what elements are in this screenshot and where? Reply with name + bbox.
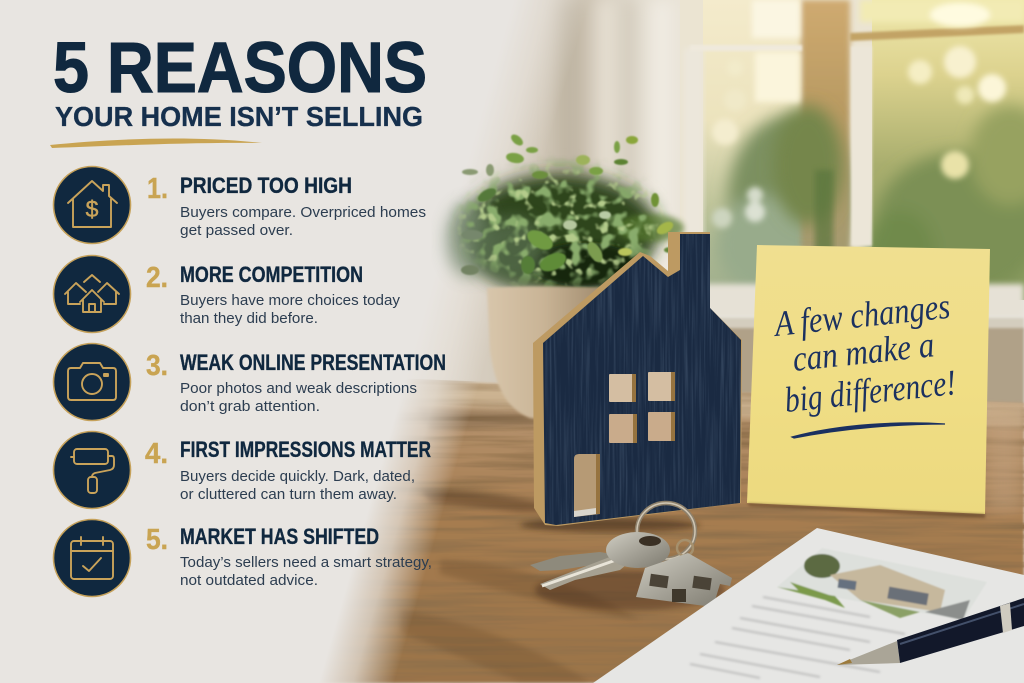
number 2: 2. <box>146 262 168 294</box>
window with garden view <box>680 0 1024 300</box>
description: don’t grab attention. <box>180 399 320 415</box>
icon: house with dollar sign <box>54 166 130 244</box>
reason 3: weak online presentation <box>54 344 446 420</box>
icon: calendar with check <box>54 520 130 596</box>
icon: cluster of houses <box>54 256 130 332</box>
house door <box>574 454 600 517</box>
house keys <box>530 503 732 610</box>
wall and curtain <box>380 0 700 410</box>
potted plant <box>436 134 688 420</box>
description <box>180 293 401 327</box>
gold brush underline <box>50 139 262 148</box>
number 3: 3. <box>146 350 168 382</box>
heading: FIRST IMPRESSIONS MATTER <box>180 437 431 462</box>
description: than they did before. <box>180 311 318 327</box>
number 5: 5. <box>146 524 168 556</box>
plant pot <box>487 286 600 420</box>
paper text lines <box>690 597 905 678</box>
description: Today’s sellers need a smart strategy, <box>180 555 432 571</box>
description: Buyers compare. Overpriced homes <box>180 205 426 221</box>
window sill and lower wall <box>700 284 1024 406</box>
plant foliage <box>436 134 688 290</box>
handwritten message: can make a <box>791 324 936 379</box>
house keychain charm <box>636 553 732 607</box>
reason 2: more competition <box>54 256 401 332</box>
description <box>180 469 415 503</box>
handwritten message: big difference! <box>783 362 958 420</box>
wooden table <box>326 380 1024 683</box>
heading: MORE COMPETITION <box>180 262 363 287</box>
icon: house with dollar sign: $ <box>86 196 99 222</box>
house windows <box>609 372 675 443</box>
reason 1: priced too high <box>54 166 426 244</box>
pen <box>837 598 1024 665</box>
description: or cluttered can turn them away. <box>180 487 397 503</box>
reason 4: first impressions matter <box>54 432 431 508</box>
heading: MARKET HAS SHIFTED <box>180 524 379 549</box>
description <box>180 555 432 589</box>
subtitle: YOUR HOME ISN’T SELLING <box>55 101 423 132</box>
icon: paint roller <box>54 432 130 508</box>
sticky note <box>747 245 990 518</box>
note underline <box>792 423 945 438</box>
icon: camera <box>54 344 130 420</box>
description: Buyers decide quickly. Dark, dated, <box>180 469 415 485</box>
handwritten message <box>771 286 958 420</box>
title: 5 REASONS <box>53 29 427 108</box>
wooden house cutout <box>520 230 745 532</box>
handwritten message: A few changes <box>771 286 952 344</box>
heading: PRICED TOO HIGH <box>180 173 352 198</box>
description: get passed over. <box>180 223 293 239</box>
photo background <box>326 0 1024 683</box>
number 4: 4. <box>145 438 168 470</box>
number 1: 1. <box>147 173 168 205</box>
description <box>180 381 417 415</box>
description: Poor photos and weak descriptions <box>180 381 417 397</box>
listing house photo <box>777 548 987 620</box>
description: Buyers have more choices today <box>180 293 401 309</box>
reason 5: market has shifted <box>54 520 432 596</box>
description: not outdated advice. <box>180 573 318 589</box>
heading: WEAK ONLINE PRESENTATION <box>180 350 446 375</box>
description <box>180 205 426 239</box>
property listing paper <box>593 528 1024 683</box>
